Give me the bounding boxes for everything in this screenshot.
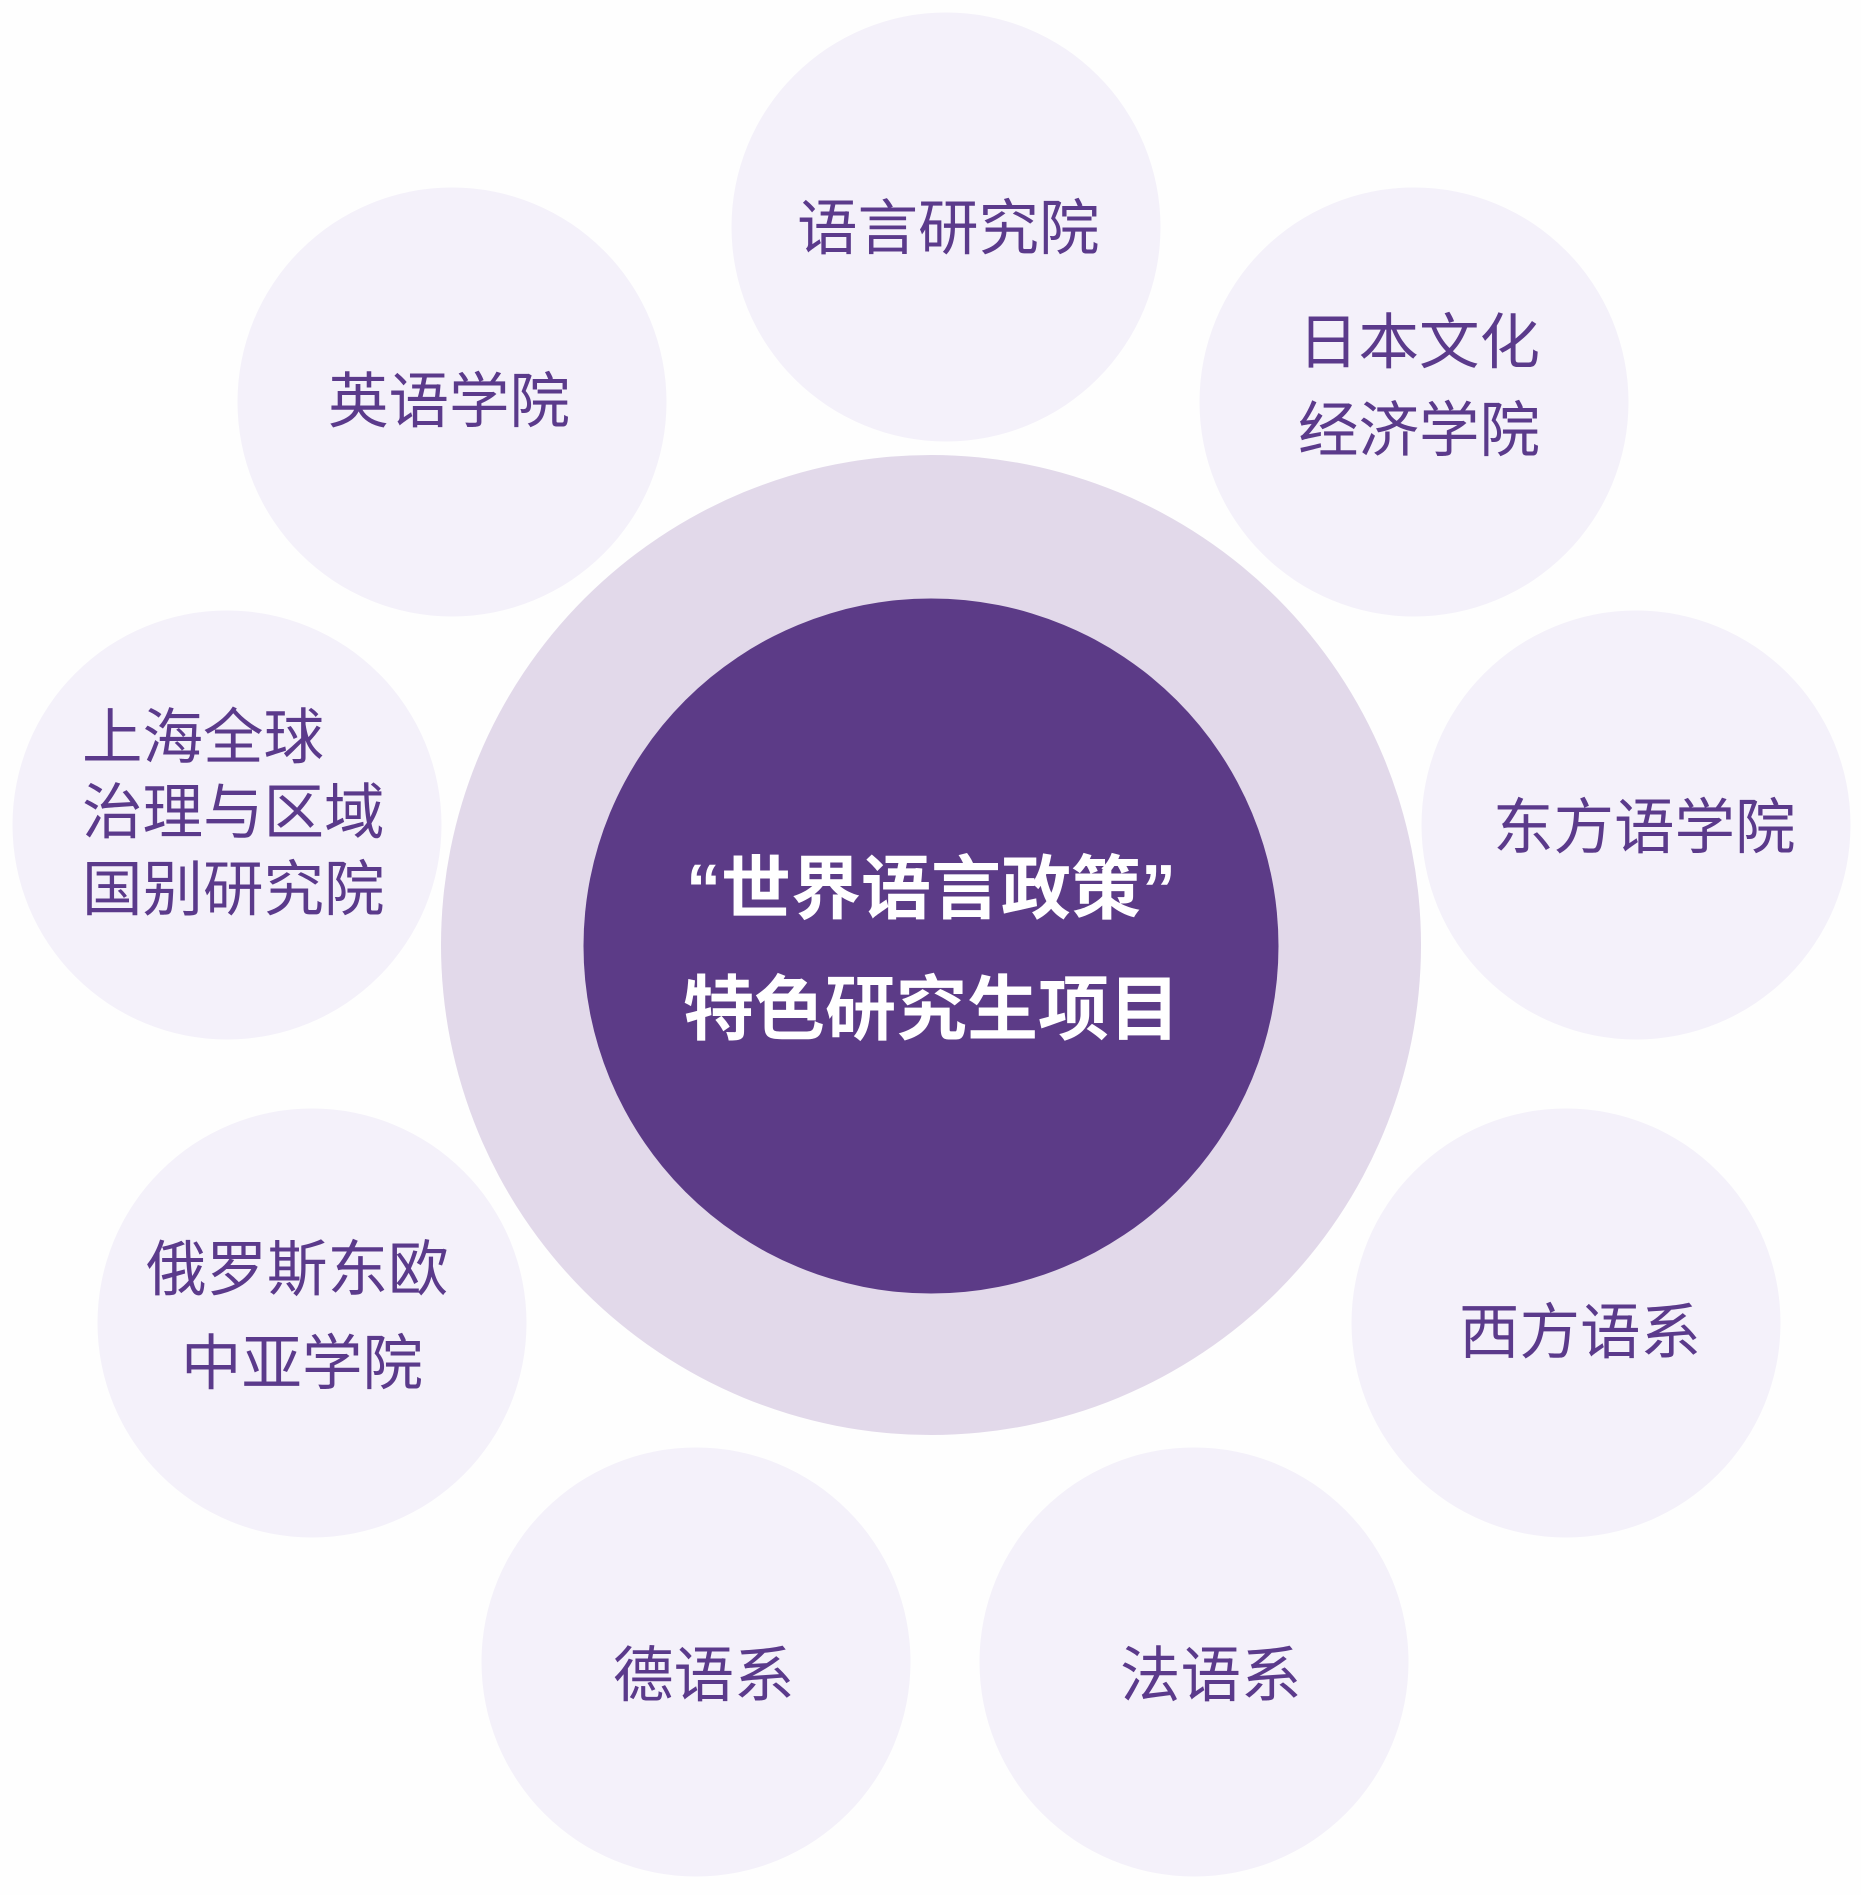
node: 法语系: 法语系 xyxy=(1120,1641,1302,1709)
node: 上海全球治理与区域国别研究院: 上海全球 xyxy=(82,703,324,771)
node: 日本文化经济学院 xyxy=(1200,188,1628,616)
node: 上海全球治理与区域国别研究院: 国别研究院 xyxy=(82,855,384,923)
node: 德语系 xyxy=(482,1448,910,1876)
node: 东方语学院: 东方语学院 xyxy=(1493,793,1796,861)
node: 上海全球治理与区域国别研究院: 治理与区域 xyxy=(82,778,384,846)
node: 俄罗斯东欧中亚学院: 俄罗斯东欧 xyxy=(146,1235,448,1303)
node: 英语学院 xyxy=(238,188,666,616)
node: 俄罗斯东欧中亚学院 xyxy=(98,1108,526,1538)
hub title xyxy=(683,850,1180,1050)
node: 语言研究院 xyxy=(732,12,1160,442)
node: 日本文化经济学院: 经济学院 xyxy=(1298,396,1540,464)
hub title: 特色研究生项目 xyxy=(683,971,1180,1050)
hub title: “世界语言政策” xyxy=(686,850,1176,928)
node: 法语系 xyxy=(980,1448,1408,1876)
center hub xyxy=(441,455,1421,1435)
node: 德语系: 德语系 xyxy=(613,1641,794,1709)
node: 东方语学院 xyxy=(1422,610,1850,1040)
outer ring xyxy=(441,455,1421,1435)
node: 西方语系 xyxy=(1352,1108,1780,1538)
node: 俄罗斯东欧中亚学院: 中亚学院 xyxy=(181,1329,423,1397)
node: 语言研究院: 语言研究院 xyxy=(797,194,1100,262)
node: 西方语系: 西方语系 xyxy=(1459,1298,1701,1366)
node: 日本文化经济学院: 日本文化 xyxy=(1298,308,1540,376)
node: 英语学院: 英语学院 xyxy=(328,367,570,435)
node: 上海全球治理与区域国别研究院 xyxy=(12,610,442,1040)
inner circle xyxy=(584,598,1278,1294)
